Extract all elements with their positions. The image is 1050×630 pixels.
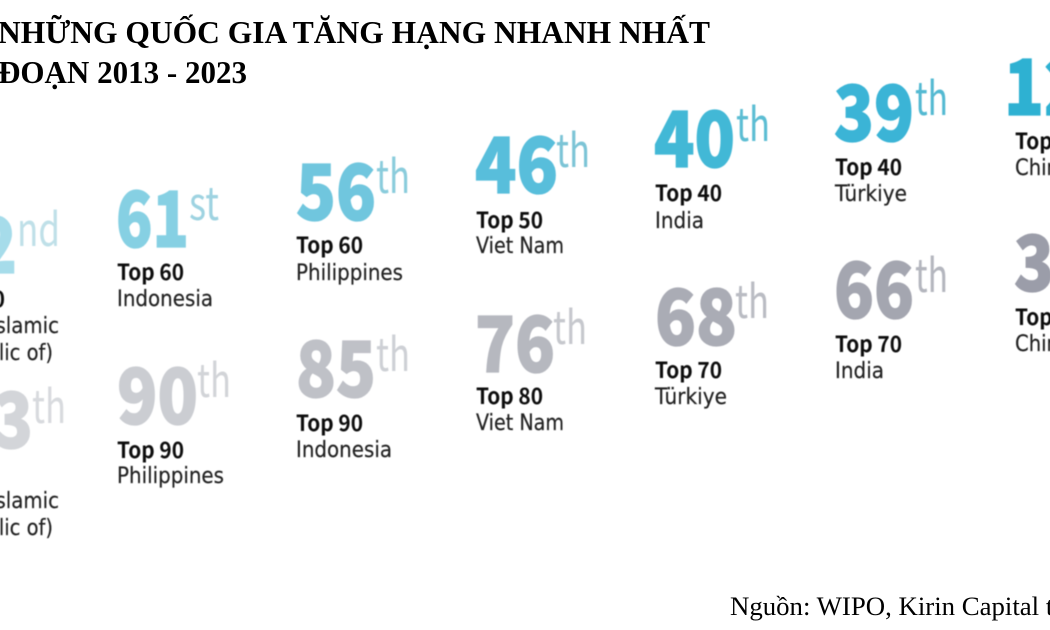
rank: Iran 93rd: th (32, 371, 66, 437)
rank: Indonesia 85th: 85 (296, 309, 376, 420)
rank: Philippines 90th (117, 336, 231, 489)
rank: Iran 62nd: nd (17, 194, 60, 260)
title: ĐOẠN 2013 - 2023 (0, 54, 247, 90)
rank: Indonesia 85th: Top 90 (296, 406, 363, 438)
rank: India 66th: India (835, 359, 884, 384)
rank: India 40th: 40 (654, 79, 735, 190)
title: NHỮNG QUỐC GIA TĂNG HẠNG NHANH NHẤT (0, 14, 710, 50)
rank: Indonesia 85th: th (376, 319, 410, 385)
rank: Türkiye 68th: 68 (655, 257, 737, 368)
rank: Philippines 56th: Philippines (296, 261, 403, 286)
rank: Türkiye 39th: th (915, 63, 948, 129)
rank: Türkiye 68th (654, 257, 769, 410)
rank: India 40th: th (736, 89, 770, 155)
rank: Indonesia 85th: Indonesia (296, 438, 392, 463)
rank: Philippines 56th (296, 132, 410, 286)
rank: Philippines 90th: Top 90 (117, 433, 184, 465)
rank: Indonesia 61st: st (189, 168, 219, 234)
rank: Viet Nam 46th: Top 50 (476, 203, 543, 235)
rank: India 40th: India (655, 209, 704, 234)
rank: Philippines 56th: th (376, 141, 410, 207)
rank: India 66th: Top 70 (835, 327, 902, 359)
rank: Türkiye 68th: th (735, 266, 769, 332)
rank: Viet Nam 76th: Viet Nam (476, 411, 564, 436)
rank: India 40th (654, 79, 770, 234)
rank: India 66th: th (915, 240, 948, 306)
rank: Türkiye 68th: Türkiye (654, 385, 727, 410)
rank: Philippines 56th: Top 60 (296, 228, 363, 260)
rank: Türkiye 39th (834, 53, 948, 207)
rank: Philippines 90th: th (197, 345, 231, 411)
rank: Indonesia 61st: 61 (116, 159, 189, 270)
rank: Indonesia 61st: Indonesia (117, 287, 213, 312)
rank: Viet Nam 76th: th (553, 292, 587, 358)
rank: Iran 93rd (0, 360, 66, 541)
rank: Philippines 90th: Philippines (117, 464, 224, 489)
rank: Indonesia 61st (116, 159, 219, 312)
rank: Philippines 56th: 56 (296, 132, 376, 243)
rank: Viet Nam 46th: th (556, 115, 590, 181)
rank: Türkiye 39th: Top 40 (835, 150, 902, 182)
rank: Türkiye 68th: Top 70 (655, 353, 722, 385)
rank: Philippines 90th: 90 (117, 336, 198, 447)
rank: Viet Nam 76th: Top 80 (476, 379, 543, 411)
title (0, 14, 710, 90)
rank: India 66th: 66 (834, 230, 914, 341)
rank: India 40th: Top 40 (655, 176, 722, 208)
rank: Viet Nam 76th: 76 (475, 284, 555, 395)
rank: India 66th (834, 230, 948, 384)
rank: Iran 62nd (0, 185, 60, 366)
rank: Viet Nam 76th (475, 284, 587, 436)
rank: Türkiye 39th: 39 (834, 53, 914, 164)
rank: Viet Nam 46th: 46 (475, 105, 558, 216)
rank: Türkiye 39th: Türkiye (834, 182, 907, 207)
rank: Viet Nam 46th: Viet Nam (476, 234, 564, 259)
rank: Indonesia 85th (296, 309, 410, 463)
rank: Indonesia 61st: Top 60 (117, 255, 184, 287)
rank: Viet Nam 46th (475, 105, 590, 259)
